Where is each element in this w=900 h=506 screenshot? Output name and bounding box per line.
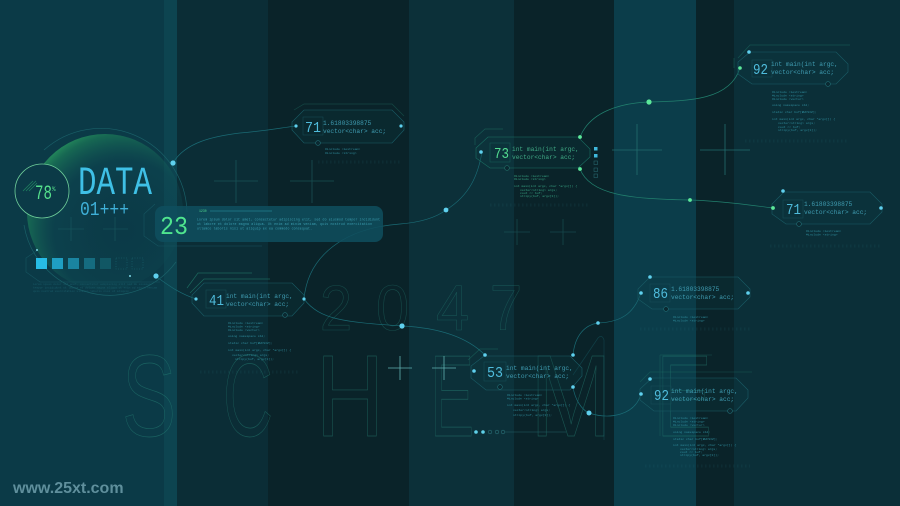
panel: 92 lower right: vector<char> acc; xyxy=(671,396,734,403)
panel: 92 top right: 92 xyxy=(753,62,768,79)
small dots xyxy=(36,249,131,277)
panel: 71 right xyxy=(770,192,882,246)
panel: 92 top right: strcpy(buf, argv[1]); xyxy=(778,128,817,132)
panel: 53 lower center: int main(int argc, char *argv[]) { xyxy=(507,403,570,407)
fine print: tempor incididunt ut labore et dolore magna aliqua ut enim ad minim veniam xyxy=(33,286,158,290)
panel: 41 left: #include <iostream> xyxy=(228,321,263,325)
panel: 73 center: int main(int argc, xyxy=(512,146,579,153)
connector lines xyxy=(155,45,850,440)
panel: 92 lower right: #include <vector> xyxy=(673,423,705,427)
panel: 23 text callout: Lorem ipsum dolor sit amet, consectetur adipiscing elit, sed do eiusmod tempor incididunt xyxy=(197,218,380,222)
panel: 41 left: vector<char> acc; xyxy=(226,301,289,308)
panel: 92 lower right: #include <string> xyxy=(673,420,705,424)
panel: 92 lower right: int main(int argc, xyxy=(671,388,738,395)
panel: 86 right: vector<char> acc; xyxy=(671,294,734,301)
panel: 92 top right: int main(int argc, xyxy=(771,61,838,68)
ghost word: SCHEME xyxy=(122,331,712,461)
panel: 92 lower right: int main(int argc, char *argv[]) { xyxy=(673,443,736,447)
globe xyxy=(27,134,183,290)
panel: 71 top-left: vector<char> acc; xyxy=(323,128,386,135)
panel: 73 center: cout << buf; xyxy=(520,191,542,195)
panel: 86 right: #include <iostream> xyxy=(673,315,708,319)
panel: 92 top right: #include <vector> xyxy=(772,97,804,101)
fine print xyxy=(33,282,158,293)
01+++ subheading: 01+++ xyxy=(80,199,129,221)
panel: 73 center: vector<string> args; xyxy=(520,188,557,192)
panel: 71 top-left: 1.61803398875 xyxy=(323,120,372,127)
panel: 86 right: 1.61803398875 xyxy=(671,286,720,293)
ghost number: 2047: 7 xyxy=(490,272,522,344)
panel: 73 center: vector<char> acc; xyxy=(512,154,575,161)
pagination squares xyxy=(594,147,598,178)
panel: 41 left: int main(int argc, char *argv[]) { xyxy=(228,348,291,352)
ghost number: 2047: 2 xyxy=(320,272,352,344)
frame around squares xyxy=(26,250,160,282)
panel: 41 left: strcpy(buf, argv[1]); xyxy=(235,357,274,361)
panel: 71 right: 71 xyxy=(786,202,801,219)
panel: 92 top right: cout << buf; xyxy=(778,125,800,129)
panel: 41 left: vector<string> args; xyxy=(232,353,269,357)
crosshair markers xyxy=(214,124,750,380)
panel: 92 lower right: cout << buf; xyxy=(680,450,702,454)
panel: 92 lower right: using namespace std; xyxy=(673,430,710,434)
panel: 92 lower right: strcpy(buf, argv[1]); xyxy=(680,453,719,457)
panel: 92 top right: #include <iostream> xyxy=(772,90,807,94)
ghost word: SCHEME: S xyxy=(122,331,176,461)
panel: 53 lower center: strcpy(buf, argv[1]); xyxy=(513,413,552,417)
panel: 92 top right xyxy=(738,52,848,141)
panel: 92 top right: int main(int argc, char *argv[]) { xyxy=(772,117,835,121)
panel: 41 left: 41 xyxy=(209,293,224,310)
ghost number: 2047 xyxy=(320,272,522,344)
panel: 41 left: static char buf[BUFSIZ]; xyxy=(228,341,273,345)
panel: 86 right: #include <string> xyxy=(673,318,705,322)
panel: 53 lower center xyxy=(471,356,582,434)
panel: 71 right: #include <iostream> xyxy=(806,229,841,233)
panel: 73 center: #include <iostream> xyxy=(514,174,549,178)
panel: 86 right: 86 xyxy=(653,286,668,303)
panel: 41 left: using namespace std; xyxy=(228,334,265,338)
panel: 41 left: #include <string> xyxy=(228,324,260,328)
panel: 71 top-left: 71 xyxy=(305,120,321,137)
panel: 92 lower right: vector<string> args; xyxy=(680,447,717,451)
ghost word: SCHEME: C xyxy=(223,331,273,461)
panel: 53 lower center: int main(int argc, xyxy=(506,365,573,372)
panel: 86 right xyxy=(638,277,750,329)
percent dial: % xyxy=(52,186,56,193)
panel: 73 center: int main(int argc, char *argv[]) { xyxy=(514,184,577,188)
panel: 73 center xyxy=(476,137,598,205)
panel: 41 left: #include <vector> xyxy=(228,328,260,332)
panel: 53 lower center: #include <string> xyxy=(507,396,539,400)
ghost number: 2047: 4 xyxy=(436,272,469,344)
panel: 53 lower center: vector<string> args; xyxy=(513,408,550,412)
panel: 73 center: strcpy(buf, argv[1]); xyxy=(520,194,559,198)
panel: 73 center: #include <string> xyxy=(514,177,546,181)
panel: 92 top right: using namespace std; xyxy=(772,103,809,107)
ghost word: SCHEME: M xyxy=(530,331,612,461)
panel: 23 text callout: ullamco laboris nisi ut aliquip ex ea commodo consequat. xyxy=(197,226,312,230)
ring faint crosses xyxy=(58,217,128,241)
panel: 73 center: 73 xyxy=(494,146,509,163)
panel: 92 top right: vector<char> acc; xyxy=(771,69,834,76)
panel: 92 lower right xyxy=(640,378,750,466)
fine print: quis nostrud exercitation ullamco laboris nisi ut aliquip xyxy=(33,289,129,293)
connector nodes: green xyxy=(578,66,775,210)
panel: 71 right: 1.61803398875 xyxy=(804,201,853,208)
ghost word: SCHEME: H xyxy=(316,331,384,461)
watermark: www.25xt.com xyxy=(12,480,124,497)
percent dial xyxy=(15,164,69,218)
panel: 92 top right: #include <string> xyxy=(772,94,804,98)
panel: 53 lower center: vector<char> acc; xyxy=(506,373,569,380)
panel: 92 top right: static char buf[BUFSIZ]; xyxy=(772,110,817,114)
panel: 71 top-left: #include <iostream> xyxy=(325,147,360,151)
panel: 41 left xyxy=(192,283,304,372)
DATA heading: DATA xyxy=(78,162,152,207)
pagination dots xyxy=(474,430,505,434)
panel: 71 top-left: #include <string> xyxy=(325,151,357,155)
panel: 23 text callout xyxy=(144,204,383,246)
panel: 23 text callout: 1230 xyxy=(199,209,207,213)
ghost word: SCHEME: E xyxy=(656,331,712,461)
panel: 92 lower right: 92 xyxy=(654,388,669,405)
ghost word: SCHEME: E xyxy=(430,331,474,461)
connector nodes: blue xyxy=(153,50,883,415)
panel: 92 lower right: #include <iostream> xyxy=(673,416,708,420)
panel: 23 text callout: 23 xyxy=(160,212,188,242)
panel: 71 right: vector<char> acc; xyxy=(804,209,867,216)
percent dial: 78 xyxy=(35,183,52,206)
orbit rings xyxy=(44,128,187,212)
panel: 53 lower center: #include <iostream> xyxy=(507,393,542,397)
hero: globe badge xyxy=(15,128,187,295)
panel: 92 top right: vector<string> args; xyxy=(778,121,815,125)
panel: 41 left: int main(int argc, xyxy=(226,293,293,300)
panel: 23 text callout: ut labore et dolore magna aliqua. Ut enim ad minim veniam, quis nostrud exercitation xyxy=(197,222,372,226)
fine print: Lorem ipsum dolor sit amet, consectetur adipiscing elit sed do eiusmod xyxy=(33,282,151,286)
ghost number: 2047: 0 xyxy=(376,272,409,344)
panel: 71 right: #include <string> xyxy=(806,232,838,236)
level squares xyxy=(36,258,143,269)
panel: 71 top-left xyxy=(292,110,404,162)
panel: 92 lower right: static char buf[BUFSIZ]; xyxy=(673,437,718,441)
panel: 53 lower center: 53 xyxy=(487,365,503,382)
